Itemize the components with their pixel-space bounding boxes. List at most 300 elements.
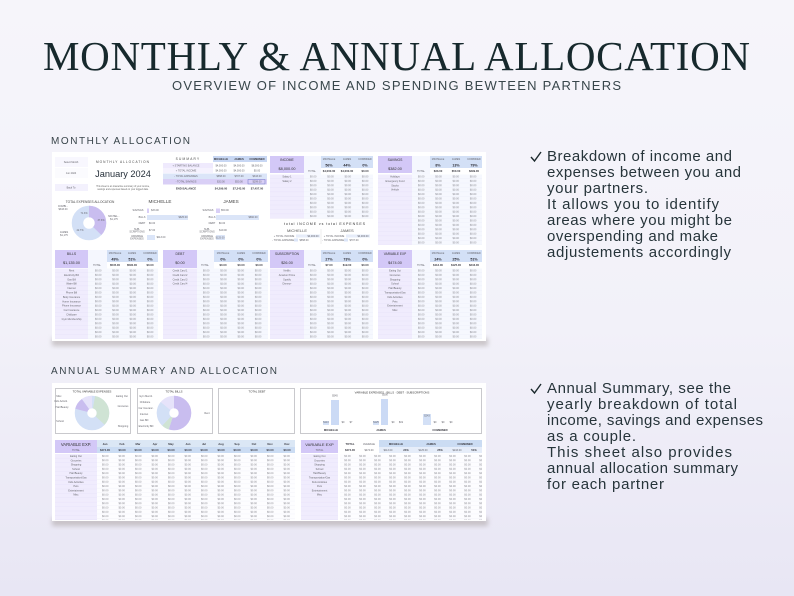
callout: monthly allocation description: It allows you to identify <box>547 196 720 213</box>
variable expenses table: JAMES <box>452 252 460 255</box>
heading: monthly allocation: MONTHLY ALLOCATION <box>51 136 190 147</box>
bar chart: james: $50.00 <box>221 209 229 212</box>
debt table: $0.00 <box>220 263 227 267</box>
annual table: monthly variable expenses: Feb <box>120 442 125 446</box>
callout: annual summary description: This sheet also provides <box>547 444 732 461</box>
income table: 44% <box>343 164 351 168</box>
annual table: monthly variable expenses: $0.00 <box>152 448 159 452</box>
income table: $4,000.00 <box>323 169 336 173</box>
bills table: Home Insurance <box>62 300 81 303</box>
month selector <box>55 157 88 191</box>
callout: annual summary description: income, savings and expenses <box>547 412 763 429</box>
subscription table: 73% <box>343 258 351 262</box>
income table <box>270 156 373 218</box>
summary table: $50.00 <box>235 180 243 184</box>
annual table: monthly variable expenses: Mar <box>136 442 141 446</box>
subscription table: Disney+ <box>282 283 292 286</box>
chart: total variable expenses: Kids Activiti. <box>54 400 68 403</box>
bar chart: james: SCRIPTIONS <box>199 230 215 234</box>
callout: monthly allocation description: Breakdown of income and <box>547 148 732 165</box>
annual table: monthly variable expenses: Oct <box>252 442 256 446</box>
subscription table: $0.00 <box>362 263 369 267</box>
donut chart: total expenses allocation: COMBI... <box>58 205 68 208</box>
bar chart: michelle <box>129 199 188 240</box>
summary table: $8,000.00 <box>251 164 263 168</box>
income table: JAMES <box>343 158 351 161</box>
income vs expenses summary <box>272 222 370 244</box>
variable expenses table: Transportation/Gas <box>384 292 406 294</box>
bar chart: expenses by partner: $0 <box>450 421 453 424</box>
annual table: allocation summary: JAMES <box>426 442 436 446</box>
savings table: Holidays <box>390 176 401 178</box>
annual table: monthly variable expenses: Apr <box>153 442 158 446</box>
summary table <box>163 156 267 190</box>
savings table: TOTAL <box>417 170 426 173</box>
bar chart: expenses by partner: $243 <box>424 414 430 418</box>
annual table: allocation summary: 51% <box>471 448 477 452</box>
savings table: Emergency Fund <box>385 180 405 183</box>
callout: annual summary description: as a couple. <box>547 428 636 445</box>
donut chart: total expenses allocation: $343.00 <box>58 208 68 211</box>
annual table: allocation summary: TOTAL <box>345 442 355 446</box>
subscription table: MICHELLE <box>323 252 336 255</box>
bar chart: michelle: MICHELLE <box>149 199 171 204</box>
bills table: $590.00 <box>127 263 137 267</box>
variable expenses table: COMBINED <box>467 252 481 255</box>
debt table: $0.00 <box>175 261 185 265</box>
annual table: monthly variable expenses: $474.00 <box>100 448 110 452</box>
panel: monthly allocation <box>52 152 488 346</box>
annual table: monthly variable expenses: May <box>168 442 174 446</box>
callout: annual summary description <box>531 380 763 493</box>
callout: monthly allocation description: adjustements accordingly <box>547 244 732 261</box>
annual table: allocation summary: $243.00 <box>452 449 462 452</box>
annual table: allocation summary: Hair/Beauty <box>313 472 327 475</box>
bar chart: expenses by partner: $545 <box>332 394 338 398</box>
annual table: allocation summary: Eating Out <box>314 455 326 458</box>
annual table: monthly variable expenses: Pets <box>73 485 79 488</box>
bills table: $1,135.00 <box>63 261 80 265</box>
income table: 0% <box>362 164 368 168</box>
income table: TOTAL <box>308 170 317 173</box>
summary table: + STARTING BALANCE <box>173 164 200 168</box>
chart: total bills: Electricity Bill <box>139 425 154 428</box>
bar chart: expenses by partner: $113 <box>323 421 329 424</box>
donut chart: total expenses allocation: TOTAL EXPENSES ALLOCATION <box>66 200 115 204</box>
bar chart: michelle: $0.00 <box>149 222 156 225</box>
bar chart: michelle: $625.00 <box>178 216 188 219</box>
annual table: allocation summary: TOTAL <box>316 449 324 452</box>
income table: $0.00 <box>362 169 369 173</box>
bar chart: james: DEBT <box>209 222 216 225</box>
savings table: Stocks <box>391 184 399 187</box>
annual table: allocation summary: School <box>316 468 324 471</box>
chart: total bills: TOTAL BILLS <box>165 390 183 394</box>
annual table: allocation summary: 25% <box>437 448 443 452</box>
donut chart: total expenses allocation <box>58 200 120 237</box>
debt table: TOTAL <box>201 264 210 267</box>
monthly allocation heading: MONTHLY ALLOCATION <box>96 160 150 164</box>
subscription table: Netflix <box>284 270 291 272</box>
annual table: monthly variable expenses: $0.00 <box>250 448 258 452</box>
summary table: + TOTAL INCOME <box>176 170 197 172</box>
summary table: MICHELLE <box>214 157 228 161</box>
annual table: allocation summary: Groceries <box>314 459 326 462</box>
debt table: MICHELLE <box>217 252 230 255</box>
annual table: monthly variable expenses: Nov <box>267 442 273 446</box>
income vs expenses summary: - TOTAL EXPENSES <box>322 239 346 242</box>
panel: annual summary <box>52 383 488 526</box>
subscription table: $26.00 <box>281 261 293 265</box>
bar chart: michelle: $7.00 <box>149 229 156 232</box>
debt table: $0.00 <box>238 263 245 267</box>
subscription table: JAMES <box>343 252 351 255</box>
debt table: $0.00 <box>256 263 263 267</box>
summary table: $0.00 <box>254 170 261 172</box>
annual table: monthly variable expenses: Hair/Beauty <box>69 472 83 475</box>
summary table: $7,457.00 <box>251 186 264 190</box>
annual table: allocation summary: MICHELLE <box>389 442 403 446</box>
savings table: $50.00 <box>452 169 461 173</box>
variable expenses table: School <box>391 283 399 286</box>
summary table: $4,000.00 <box>215 164 227 168</box>
income table: $8,000.00 <box>279 167 295 171</box>
annual table: allocation summary: Entertainment <box>312 489 328 492</box>
summary table: $4,299.00 <box>215 186 228 190</box>
annual table: monthly variable expenses: $0.00 <box>134 448 142 452</box>
annual table: allocation summary: Shopping <box>314 464 325 467</box>
income table: MICHELLE <box>323 158 336 161</box>
bills table: 0% <box>147 258 153 262</box>
bar chart: michelle: SUB- <box>134 228 140 231</box>
annual table: monthly variable expenses: $0.00 <box>284 448 291 452</box>
income vs expenses summary: $658.00 <box>299 239 309 242</box>
annual table: monthly variable expenses: $0.00 <box>200 448 208 452</box>
chart: total variable expenses: Groceries <box>118 405 129 408</box>
annual table: monthly variable expenses: $0.00 <box>168 448 175 452</box>
variable expenses table: Shopping <box>390 278 401 281</box>
variable expenses table: 51% <box>470 258 478 262</box>
bar chart: expenses by partner: $0 <box>434 421 437 424</box>
annual table: monthly variable expenses: School <box>72 468 80 471</box>
icon: check mark <box>531 384 541 393</box>
donut chart: total expenses allocation: $1,175 <box>110 218 118 221</box>
bar chart: expenses by partner: VARIABLE EXPENSES · BILLS · DEBT · SUBSCRIPTIONS <box>355 390 429 394</box>
chart: total bills: Rent <box>204 412 210 415</box>
summary table: SUMMARY <box>176 157 200 161</box>
annual table: allocation summary: $474.00 <box>364 449 374 452</box>
debt table: DEBT <box>175 252 185 256</box>
bar chart: expenses by partner: $7 <box>350 421 353 424</box>
summary table: COMBINED <box>249 157 265 161</box>
summary table: - TOTAL SAVINGS <box>176 180 197 184</box>
summary table: JAMES <box>234 157 244 161</box>
chart: total variable expenses <box>54 388 130 434</box>
chart: total bills <box>138 388 212 434</box>
annual table: monthly variable expenses: Sep <box>234 442 240 446</box>
annual table: allocation summary: $113.00 <box>384 449 393 452</box>
annual table: monthly variable expenses: Eating Out <box>70 455 82 458</box>
chart: total variable expenses: Shopping <box>118 425 129 428</box>
bills table: Gym Membership <box>62 318 82 321</box>
income table: INCOME <box>280 158 295 162</box>
bills table: $545.00 <box>110 263 120 267</box>
chart: total variable expenses: Hair/Beauty <box>55 406 69 409</box>
variable expenses table: Groceries <box>390 274 401 277</box>
bar chart: michelle: SCRIPTIONS <box>129 230 145 234</box>
annual table: allocation summary: COMBINED <box>457 442 473 446</box>
annual table: allocation summary: VARIABLE EXP <box>305 442 334 447</box>
annual table: monthly variable expenses: TOTAL <box>72 449 81 452</box>
subscription table: Amazon Prime <box>279 274 296 277</box>
bar chart: expenses by partner: $0 <box>342 421 345 424</box>
variable expenses table: $125.00 <box>451 263 461 267</box>
callout: monthly allocation description: overspending and make <box>547 228 718 245</box>
annual table: monthly variable expenses: Kids Activities <box>68 481 84 484</box>
donut chart: total expenses allocation: $1,175 <box>60 234 68 237</box>
bills table: COMBINED <box>143 252 157 255</box>
bills table: Internet <box>67 287 76 290</box>
variable expenses table: Eating Out <box>389 270 401 272</box>
heading: annual summary: ANNUAL SUMMARY AND ALLOCATION <box>51 366 277 377</box>
savings table <box>378 156 482 245</box>
bills table: JAMES <box>128 252 136 255</box>
bar chart: james: JAMES <box>223 199 239 204</box>
chart: total bills: Gym Memb. <box>139 395 153 398</box>
chart: total bills: Gas Bill <box>140 419 149 422</box>
monthly allocation heading <box>95 160 151 191</box>
income vs expenses summary: + TOTAL INCOME <box>274 235 295 238</box>
chart: total variable expenses: School <box>56 420 64 423</box>
income vs expenses summary: + TOTAL INCOME <box>324 235 345 238</box>
donut chart: total expenses allocation: JAMES <box>60 231 68 234</box>
month selector: Jun 2024 <box>66 172 77 175</box>
chart: total variable expenses: Misc <box>56 395 62 398</box>
bills table: Car Insurance <box>64 309 80 312</box>
annual table: monthly variable expenses: Jan <box>103 442 108 446</box>
debt table: 0% <box>220 258 226 262</box>
title: MONTHLY & ANNUAL ALLOCATION <box>43 33 750 79</box>
variable expenses table: $113.00 <box>433 263 443 267</box>
chart: total bills: Childcare <box>140 401 151 404</box>
summary table: $33.00 <box>217 180 225 184</box>
bar chart: james: SUB- <box>204 228 210 231</box>
callout: monthly allocation description: areas where you might be <box>547 212 732 229</box>
bar chart: michelle: SAVINGS <box>133 209 144 212</box>
variable expenses table: TOTAL <box>417 264 426 267</box>
summary table: $658.00 <box>216 175 226 178</box>
debt table: COMBINED <box>252 252 266 255</box>
monthly allocation heading: This sheet is an interactive summary of your income, <box>96 185 150 188</box>
bills table: $0.00 <box>146 263 154 267</box>
chart: total debt (empty): TOTAL DEBT <box>249 390 266 394</box>
bills table: TOTAL <box>93 264 102 267</box>
summary table: $299.00 <box>252 180 262 184</box>
annual table: allocation summary: $474.00 <box>345 448 355 452</box>
subscription table <box>270 250 373 339</box>
bar chart: michelle: EXPENSES <box>130 238 144 240</box>
debt table: Credit Card 2 <box>173 274 188 277</box>
annual table: monthly variable expenses: Transportation/Gas <box>65 476 87 480</box>
variable expenses table: 24% <box>434 258 442 262</box>
bills table: Childcare <box>66 314 77 316</box>
annual table: allocation summary: Misc <box>317 494 323 497</box>
callout: monthly allocation description <box>531 148 741 261</box>
annual table: allocation summary: Kids Activities <box>312 481 328 484</box>
chart: total bills: Car Insuranc. <box>138 407 154 410</box>
savings table: 8% <box>435 164 441 168</box>
bar chart: expenses by partner: $590 <box>382 394 388 396</box>
bills table: Gas Bill <box>67 278 76 281</box>
annual table: monthly variable expenses: $0.00 <box>218 448 225 452</box>
bar chart: james: $19.00 <box>219 229 227 232</box>
savings table: MICHELLE <box>432 158 445 161</box>
bills table: Rent <box>69 270 74 272</box>
bar chart: michelle: BILLS <box>139 216 146 219</box>
donut chart: total expenses allocation: MICHEL... <box>108 215 120 218</box>
annual table: monthly variable expenses: Shopping <box>71 464 82 467</box>
month selector: Back To <box>67 186 76 190</box>
bar chart: james: VARIABLE <box>201 235 213 238</box>
bar chart: expenses by partner: $0 <box>392 421 395 424</box>
subtitle: OVERVIEW OF INCOME AND SPENDING BEWTEEN PARTNERS <box>172 78 621 93</box>
income vs expenses summary: JAMES <box>340 228 354 233</box>
savings table: $33.00 <box>434 169 443 173</box>
bar chart: expenses by partner: $125 <box>373 421 379 424</box>
variable expenses table: Pets <box>392 300 398 303</box>
bar chart: james <box>199 199 259 240</box>
income vs expenses summary: MICHELLE <box>287 228 307 233</box>
callout: annual summary description: yearly breakdown of total <box>547 396 737 413</box>
annual table: monthly variable expenses: $0.00 <box>266 448 274 452</box>
savings table: $299.00 <box>469 169 479 173</box>
debt table: Credit Card 4 <box>173 283 188 286</box>
bar chart: james: $660.00 <box>248 216 258 219</box>
callout: annual summary description: Annual Summary, see the <box>547 380 731 397</box>
annual table: allocation summary: 24% <box>403 448 409 452</box>
callout: annual summary description: annual allocation summary <box>547 460 738 477</box>
bar chart: james: EXPENSES <box>200 238 214 240</box>
monthly allocation heading: January 2024 <box>95 169 151 179</box>
bar chart: expenses by partner: COMBINED <box>432 428 448 432</box>
bar chart: michelle: $113.00 <box>157 236 166 239</box>
variable expenses table: Kids Activities <box>387 296 403 299</box>
savings table: 79% <box>470 164 478 168</box>
income table: Salary 2 <box>282 180 292 183</box>
savings table: $382.00 <box>388 167 402 171</box>
variable expenses table: 25% <box>452 258 460 262</box>
chart: total bills: Internet <box>140 413 149 416</box>
annual table: monthly variable expenses: Jun <box>186 442 191 446</box>
subscription table: TOTAL <box>308 264 317 267</box>
debt table: Credit Card 3 <box>173 278 188 281</box>
annual table: monthly variable expenses: Aug <box>218 442 224 446</box>
chart: total debt (empty) <box>218 388 294 434</box>
bills table: Water Bill <box>66 283 77 286</box>
subscription table: SUBSCRIPTION <box>275 252 300 256</box>
bar chart: michelle: DEBT <box>139 222 146 225</box>
income vs expenses summary: - TOTAL EXPENSES <box>272 239 296 242</box>
summary table: - TOTAL EXPENSES <box>174 175 198 178</box>
income table: 56% <box>325 164 333 168</box>
subscription table: COMBINED <box>358 252 372 255</box>
bar chart: expenses by partner <box>300 388 482 434</box>
annual table: monthly variable expenses: $0.00 <box>118 448 126 452</box>
debt table <box>163 250 268 339</box>
savings table: 13% <box>452 164 460 168</box>
bar chart: expenses by partner: MICHELLE <box>324 428 338 432</box>
callout: annual summary description: for each partner <box>547 476 664 493</box>
subscription table: $19.00 <box>343 263 352 267</box>
subscription table: 27% <box>325 258 333 262</box>
month selector: Select Month <box>64 161 79 164</box>
annual table: monthly variable expenses: Groceries <box>71 459 82 462</box>
summary table: $4,000.00 <box>233 164 245 168</box>
savings table: SAVINGS <box>388 158 403 162</box>
variable expenses table: Hair/Beauty <box>388 287 402 290</box>
donut chart: total expenses allocation: 37.3% <box>97 219 105 222</box>
callout: monthly allocation description: expenses between you and <box>547 164 741 181</box>
annual table: monthly variable expenses: Jul <box>202 442 206 446</box>
annual table: monthly variable expenses: Entertainment <box>68 489 84 492</box>
variable expenses table: Misc <box>392 309 398 312</box>
monthly allocation heading: savings and expenses based on your logged data. <box>97 188 149 191</box>
summary table: $343.00 <box>252 175 262 178</box>
summary table: $4,000.00 <box>233 170 245 172</box>
donut chart: total expenses allocation: 42.7% <box>76 229 84 232</box>
bills table: 51% <box>128 258 136 262</box>
bills table: Phone Insurance <box>62 305 82 308</box>
summary table: $707.00 <box>234 175 244 178</box>
bills table: BILLS <box>67 252 77 256</box>
annual table: monthly variable expenses <box>55 440 295 520</box>
bar chart: michelle: $33.00 <box>151 209 159 212</box>
bills table: Body Insurance <box>63 296 81 299</box>
variable expenses table: MICHELLE <box>432 252 445 255</box>
annual table: allocation summary: Transportation/Gas <box>309 476 331 480</box>
income table: $4,000.00 <box>341 169 354 173</box>
bills table: MICHELLE <box>109 252 122 255</box>
annual table: monthly variable expenses: $0.00 <box>184 448 192 452</box>
bar chart: james: BILLS <box>209 216 216 219</box>
bills table: Electricity Bill <box>64 274 79 277</box>
subscription table: 0% <box>362 258 368 262</box>
variable expenses table: $243.00 <box>469 263 479 267</box>
variable expenses table <box>378 250 482 339</box>
income vs expenses summary: total INCOME vs total EXPENSES <box>284 222 366 226</box>
bar chart: expenses by partner: JAMES <box>376 428 386 432</box>
savings table: COMBINED <box>467 158 481 161</box>
annual table: allocation summary: $125.00 <box>418 449 428 452</box>
annual table: monthly variable expenses: Misc <box>73 494 79 497</box>
annual table: monthly variable expenses: VARIABLE EXP. <box>61 442 91 447</box>
chart: total variable expenses: TOTAL VARIABLE EXPENSES <box>73 390 112 394</box>
income vs expenses summary: $4,000.00 <box>357 235 369 238</box>
summary table: END BALANCE <box>176 186 196 190</box>
income vs expenses summary: $707.00 <box>349 239 359 242</box>
annual table: monthly variable expenses: $0.00 <box>234 448 241 452</box>
subscription table: $7.00 <box>326 263 333 267</box>
variable expenses table: $474.00 <box>388 261 402 265</box>
bar chart: expenses by partner: $0 <box>442 421 445 424</box>
callout: monthly allocation description: your partners. <box>547 180 648 197</box>
chart: total variable expenses: Eating Out <box>116 395 128 398</box>
donut chart: total expenses allocation: 71.3% <box>80 212 88 215</box>
bar chart: james: $0.00 <box>219 222 226 225</box>
annual table: monthly variable expenses: Dec <box>284 442 290 446</box>
income vs expenses summary: $4,000.00 <box>307 235 319 238</box>
bills table: 49% <box>111 258 119 262</box>
